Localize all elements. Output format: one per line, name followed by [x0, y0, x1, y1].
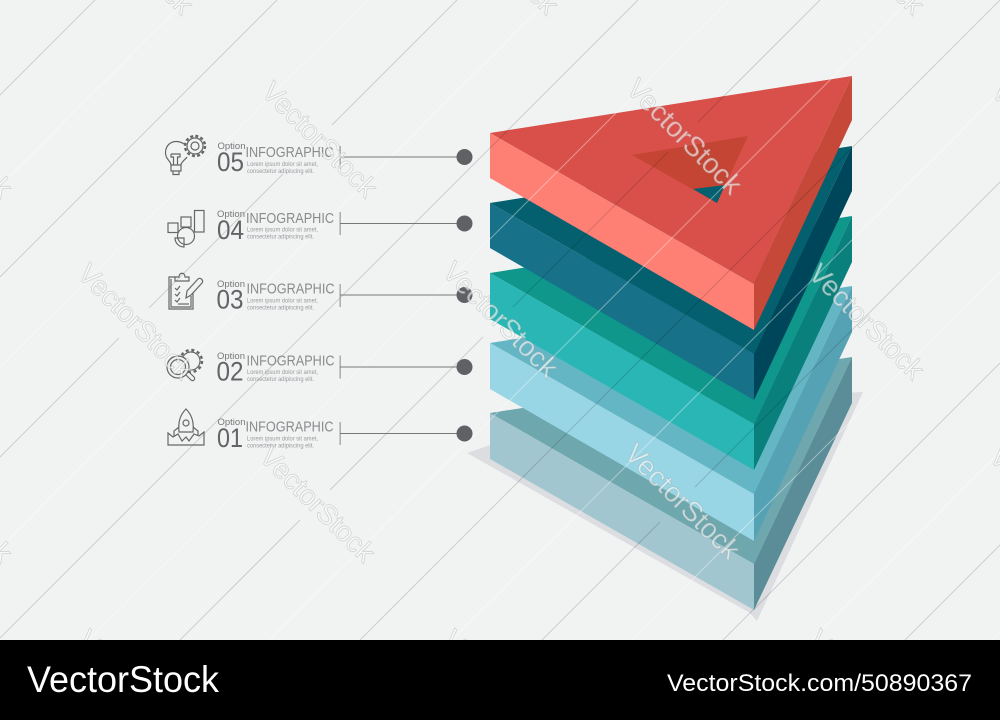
body text: Lorem ipsum dolor sit amet, [247, 298, 318, 304]
footer logo text: VectorStock [27, 659, 219, 700]
number: 05 [217, 147, 244, 177]
icon: clipboard and pencil [169, 273, 203, 309]
footer band [0, 640, 1000, 720]
body text [247, 298, 318, 312]
option label: Option [217, 209, 245, 220]
option label: Option [218, 417, 246, 428]
body text: consectetur adipiscing elit. [247, 442, 314, 450]
ground shadow [467, 392, 863, 621]
number: 04 [217, 215, 244, 245]
body text [247, 226, 318, 240]
option 05 row [165, 136, 472, 177]
footer image id: VectorStock.com/50890367 [667, 670, 972, 697]
number: 02 [216, 356, 244, 386]
watermarks: VectorStock [621, 73, 749, 201]
option label: Option [218, 141, 246, 152]
connector with dot [340, 422, 472, 445]
option label: Option [217, 279, 245, 290]
connector with dot [340, 212, 472, 235]
body text [247, 369, 318, 383]
watermarks: VectorStock [254, 441, 382, 569]
watermarks: VectorStock [256, 76, 384, 204]
option 02 row [167, 350, 472, 386]
connector with dot [340, 356, 472, 378]
option 04 row [168, 209, 472, 247]
heading: INFOGRAPHIC [246, 280, 335, 298]
body text [247, 436, 318, 450]
heading: INFOGRAPHIC [246, 418, 334, 436]
heading: INFOGRAPHIC [246, 352, 335, 370]
body text: consectetur adipiscing elit. [247, 304, 314, 312]
icon: gear and magnifying glass [167, 350, 202, 381]
number: 01 [217, 423, 243, 453]
body text: consectetur adipiscing elit. [247, 234, 314, 240]
layer 01: pale blue-grey [490, 357, 852, 610]
icon: light bulb and gear [165, 136, 205, 174]
connector with dot [340, 284, 472, 307]
watermarks: VectorStock [437, 256, 565, 384]
option 03 row [169, 273, 472, 314]
layer 04: dark teal [490, 146, 852, 400]
body text: Lorem ipsum dolor sit amet, [247, 161, 318, 168]
body text: consectetur adipiscing elit. [247, 168, 314, 175]
layer 03: teal [490, 216, 852, 470]
heading: INFOGRAPHIC [246, 210, 334, 227]
layer 05: red top with triangular hole [490, 76, 852, 330]
number: 03 [216, 284, 244, 314]
watermarks: VectorStock [619, 438, 747, 566]
watermarks: VectorStock [803, 258, 931, 386]
body text: Lorem ipsum dolor sit amet, [247, 436, 318, 442]
body text [247, 161, 318, 175]
watermarks: VectorStock [72, 258, 200, 386]
icon: blocks, bar and pie chart [168, 210, 204, 247]
option label: Option [217, 351, 245, 362]
heading: INFOGRAPHIC [246, 144, 334, 161]
connector with dot [340, 146, 472, 169]
layered triangle stack [490, 76, 852, 610]
body text: Lorem ipsum dolor sit amet, [247, 226, 318, 234]
icon: rocket launch [168, 409, 204, 445]
option 01 row [168, 409, 472, 453]
body text: Lorem ipsum dolor sit amet, [247, 369, 318, 376]
body text: consectetur adipiscing elit. [247, 376, 314, 383]
layer 02: light blue [490, 286, 852, 541]
